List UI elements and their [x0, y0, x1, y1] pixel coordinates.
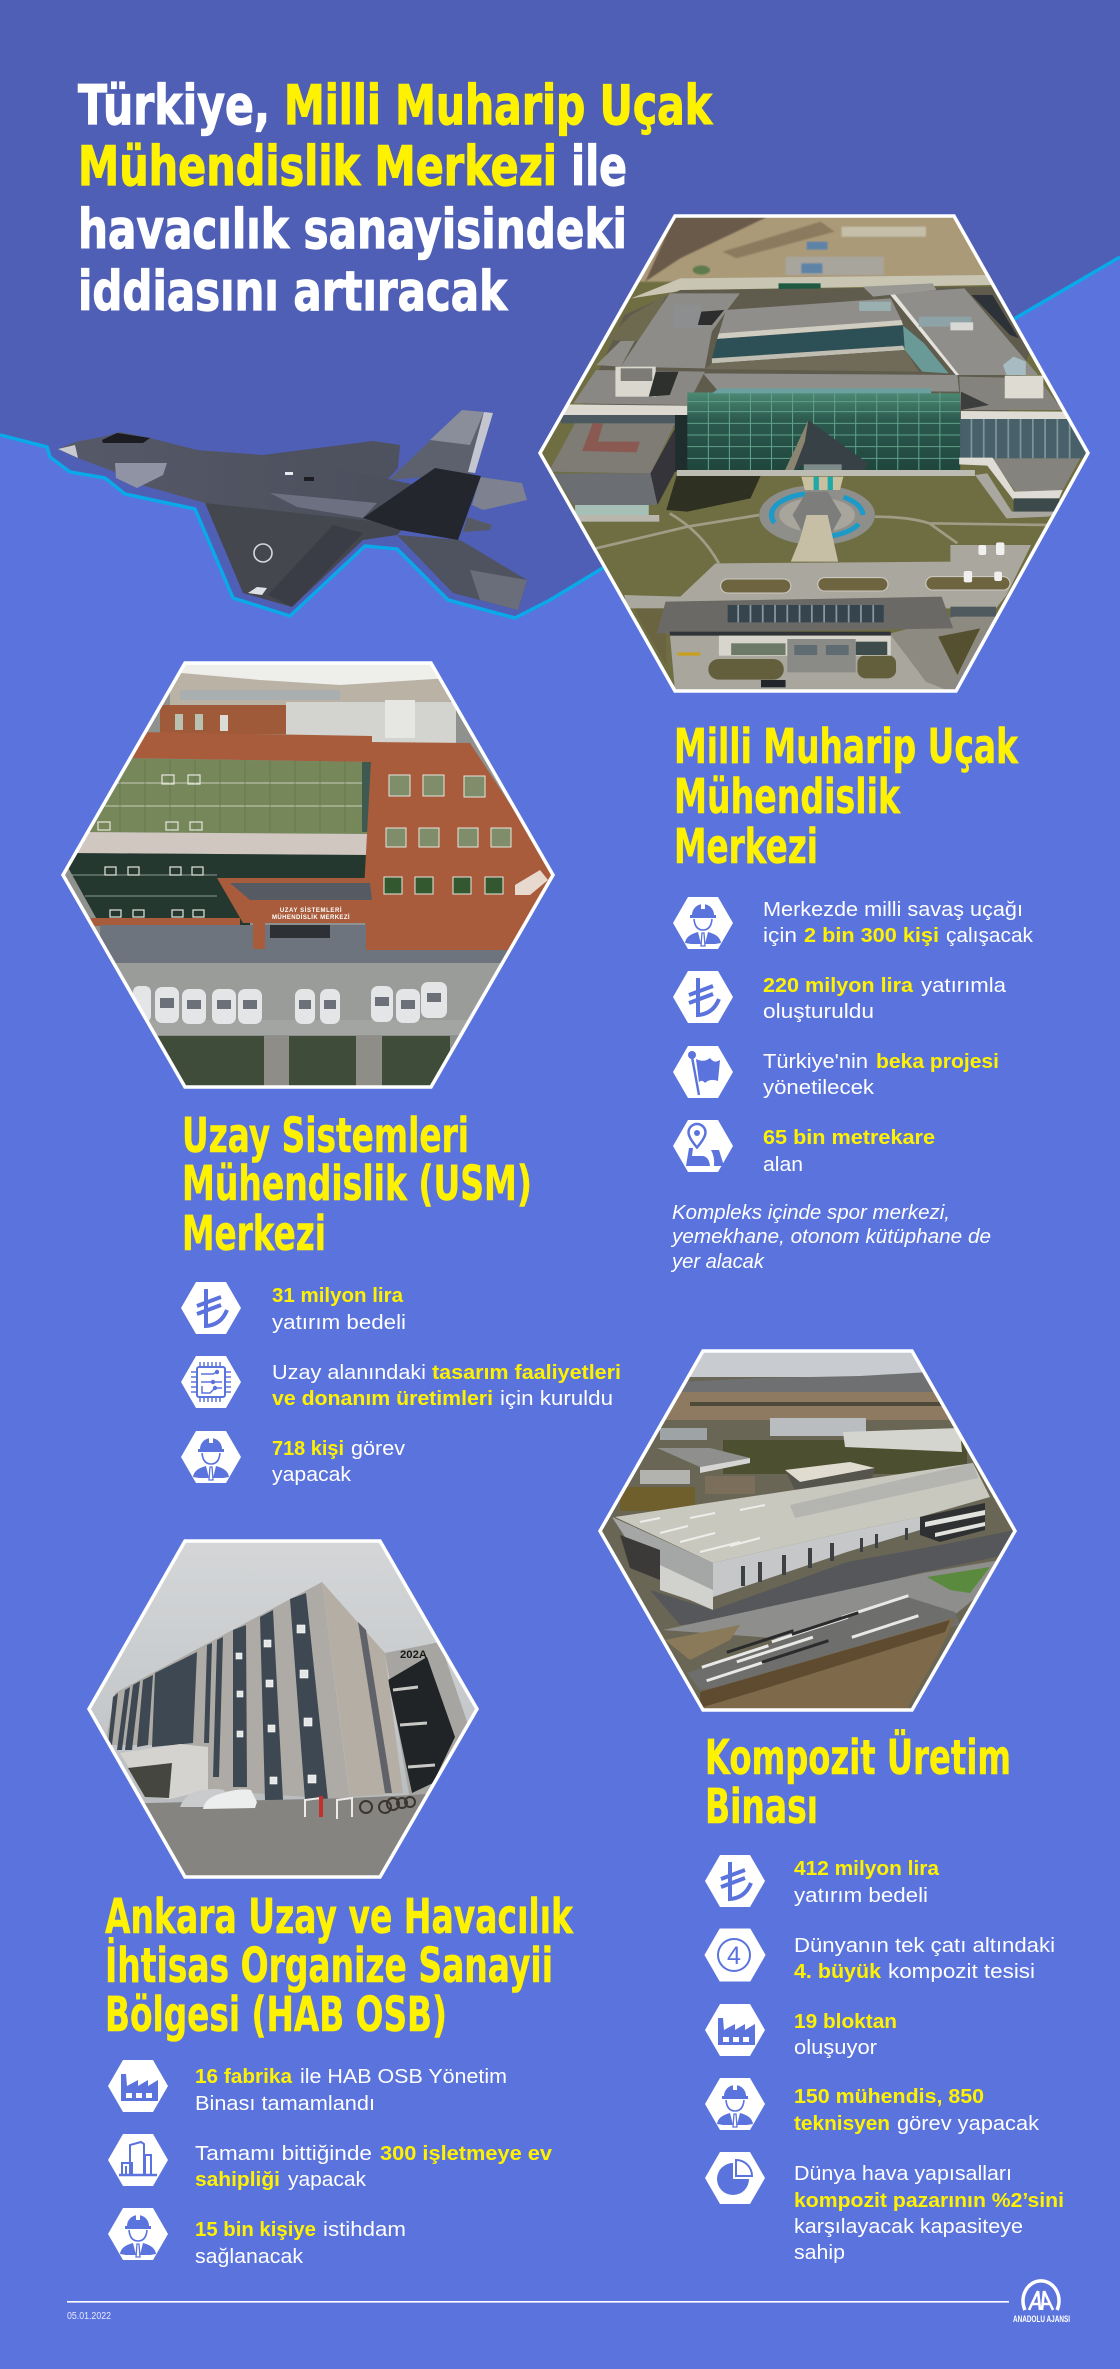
text: 300 işletmeye: Tamamı bittiğinde — [195, 2143, 372, 2165]
text: 220 milyon lira: 220 milyon lira — [763, 975, 914, 997]
date: 05.01.2022 — [67, 2311, 111, 2322]
text: beka projesi — [763, 1051, 999, 1099]
text: 4. büyük: kompozit tesisi — [888, 1961, 1035, 1983]
text: beka projesi: Türkiye'nin — [763, 1051, 868, 1073]
icon: number 4: 4 — [727, 1942, 741, 1970]
text: 16 fabrika: 16 fabrika — [195, 2066, 293, 2088]
text: 2 bin 300 kişi: için — [763, 925, 797, 947]
text: beka projesi: beka projesi — [876, 1051, 999, 1073]
text: 2 bin 300 kişi: çalışacak — [946, 925, 1034, 947]
heading — [705, 1729, 1011, 1835]
title: havacılık sanayisindeki — [78, 198, 627, 261]
text: tasarım faaliyetleri — [272, 1362, 621, 1410]
cyan boundary line — [0, 257, 1120, 618]
text: 16 fabrika: ile HAB OSB Yönetim — [300, 2066, 507, 2088]
text: 220 milyon lira: yatırımla — [921, 975, 1007, 997]
text: 19 bloktan: oluşuyor — [794, 2037, 877, 2059]
icon: engineer — [673, 897, 733, 949]
heading — [674, 719, 1019, 875]
icon: pie chart — [705, 2152, 765, 2204]
icon: lira — [705, 1855, 765, 1907]
text: 65 bin metrekare: 65 bin metrekare — [763, 1127, 935, 1149]
heading: Binası — [705, 1779, 818, 1835]
text: kompozit pazarı — [794, 2163, 1064, 2264]
panel: Milli Muharip Uçak Mühendislik Merkezi — [540, 215, 1090, 1273]
text: 150 mühendis: 150 mühendis, 850 — [794, 2086, 984, 2108]
text: 150 mühendis: teknisyen — [794, 2113, 890, 2135]
icon: lira — [673, 971, 733, 1023]
text: 2 bin 300 kişi: Merkezde milli savaş uçağı — [763, 899, 1023, 921]
text: 2 bin 300 kişi — [763, 899, 1034, 947]
title: ile — [571, 135, 627, 198]
icon: chip — [181, 1356, 241, 1408]
icon: factory — [108, 2060, 168, 2112]
text: 220 milyon lira: oluşturuldu — [763, 1001, 874, 1023]
text: 412 milyon lira: 412 milyon lira — [794, 1858, 940, 1880]
photo: USM building — [60, 660, 560, 1091]
text: 718 kişi: yapacak — [272, 1464, 352, 1486]
icon: location map — [673, 1120, 733, 1172]
heading — [182, 1108, 532, 1262]
text: kompozit pazarı: sahip — [794, 2242, 845, 2264]
text: tasarım faaliyetleri: Uzay alanındaki — [272, 1362, 426, 1384]
icon: factory — [705, 2004, 765, 2056]
heading: Mühendislik (USM) — [182, 1156, 532, 1212]
logo: Anadolu Ajansı — [1013, 2281, 1070, 2324]
icon: engineer — [705, 2078, 765, 2130]
icon: buildings — [108, 2134, 168, 2186]
text: 150 mühendis: görev yapacak — [897, 2113, 1040, 2135]
panel: Uzay Sistemleri Mühendislik Merkezi — [60, 660, 621, 1486]
heading: İhtisas Organize Sanayii — [105, 1937, 553, 1994]
photo: USM building: MÜHENDİSLİK MERKEZİ — [272, 914, 350, 921]
photo: MMU engineering centre aerial — [540, 215, 1090, 695]
logo: Anadolu Ajansı: ANADOLU AJANSI — [1013, 2314, 1070, 2324]
text: 300 işletmeye — [195, 2143, 553, 2191]
panel: Kompozit Üretim Binası — [595, 1345, 1064, 2264]
text: kompozit pazarı: kompozit pazarının %2’sini — [794, 2190, 1064, 2212]
photo: HAB OSB management building: 202A — [400, 1649, 427, 1661]
text: 300 işletmeye: 300 işletmeye ev — [380, 2143, 553, 2165]
text: tasarım faaliyetleri: tasarım faaliyetleri — [432, 1362, 621, 1384]
icon: engineer — [108, 2208, 168, 2260]
text: tasarım faaliyetleri: için kuruldu — [500, 1388, 613, 1410]
photo: USM building: UZAY SİSTEMLERİ — [280, 907, 342, 914]
title: iddiasını artıracak — [78, 260, 508, 323]
heading: Merkezi — [182, 1206, 326, 1262]
text: beka projesi: yönetilecek — [763, 1077, 875, 1099]
title: Mühendislik Merkezi — [78, 135, 557, 198]
heading: Mühendislik — [674, 769, 901, 825]
text: 31 milyon lira: yatırım bedeli — [272, 1312, 406, 1334]
text: 4. büyük — [794, 1935, 1055, 1983]
text: 412 milyon lira: yatırım bedeli — [794, 1885, 928, 1907]
heading: Bölgesi (HAB OSB) — [105, 1987, 447, 2043]
panel: HAB OSB — [85, 1538, 574, 2268]
text: 16 fabrika — [195, 2066, 507, 2115]
text: 65 bin metrekare — [763, 1127, 935, 1176]
text: 718 kişi: görev — [351, 1438, 405, 1460]
italic note: Kompleks içinde spor merkezi, — [672, 1202, 950, 1224]
text: 718 kişi — [272, 1438, 405, 1486]
heading: Ankara Uzay ve Havacılık — [105, 1889, 574, 1945]
text: 31 milyon lira: 31 milyon lira — [272, 1285, 404, 1307]
text: 65 bin metrekare: alan — [763, 1154, 803, 1176]
text: 4. büyük: 4. büyük — [794, 1961, 882, 1983]
text: 2 bin 300 kişi: 2 bin 300 kişi — [804, 925, 939, 947]
italic note: yer alacak — [670, 1251, 765, 1273]
fighter jet illustration — [58, 410, 527, 610]
text: 15 bin kişiye: sağlanacak — [195, 2246, 304, 2268]
text: 220 milyon lira — [763, 975, 1007, 1023]
text: 4. büyük: Dünyanın tek çatı altındaki — [794, 1935, 1055, 1957]
icon: lira — [181, 1282, 241, 1334]
text: 15 bin kişiye: 15 bin kişiye — [195, 2219, 316, 2241]
text: 15 bin kişiye — [195, 2219, 406, 2268]
text: 31 milyon lira — [272, 1285, 406, 1334]
title: Milli Muharip Uçak — [284, 74, 713, 137]
heading — [105, 1889, 574, 2043]
text: 300 işletmeye: yapacak — [288, 2169, 367, 2191]
text: tasarım faaliyetleri: ve donanım üretimleri — [272, 1388, 493, 1410]
italic note — [670, 1202, 991, 1273]
heading: Uzay Sistemleri — [182, 1108, 469, 1164]
footer rule — [67, 2301, 1009, 2303]
icon: number 4 — [705, 1929, 765, 1981]
icon: flag — [673, 1046, 733, 1098]
photo: HAB OSB management building — [85, 1538, 480, 1880]
icon: engineer — [181, 1431, 241, 1483]
text: 300 işletmeye: sahipliği — [195, 2169, 280, 2191]
italic note: yemekhane, otonom kütüphane de — [670, 1226, 991, 1248]
text: 19 bloktan: 19 bloktan — [794, 2011, 897, 2033]
text: kompozit pazarı: karşılayacak kapasiteye — [794, 2216, 1023, 2238]
photo: composite factory aerial — [595, 1345, 1020, 1715]
text: 718 kişi: 718 kişi — [272, 1438, 344, 1460]
title — [78, 74, 713, 323]
text: 150 mühendis — [794, 2086, 1040, 2135]
text: 412 milyon lira — [794, 1858, 940, 1907]
text: 15 bin kişiye: istihdam — [323, 2219, 406, 2241]
text: 16 fabrika: Binası tamamlandı — [195, 2093, 375, 2115]
title: Türkiye, — [78, 74, 270, 137]
text: kompozit pazarı: Dünya hava yapısalları — [794, 2163, 1012, 2185]
text: 19 bloktan — [794, 2011, 897, 2059]
heading: Merkezi — [674, 819, 818, 875]
